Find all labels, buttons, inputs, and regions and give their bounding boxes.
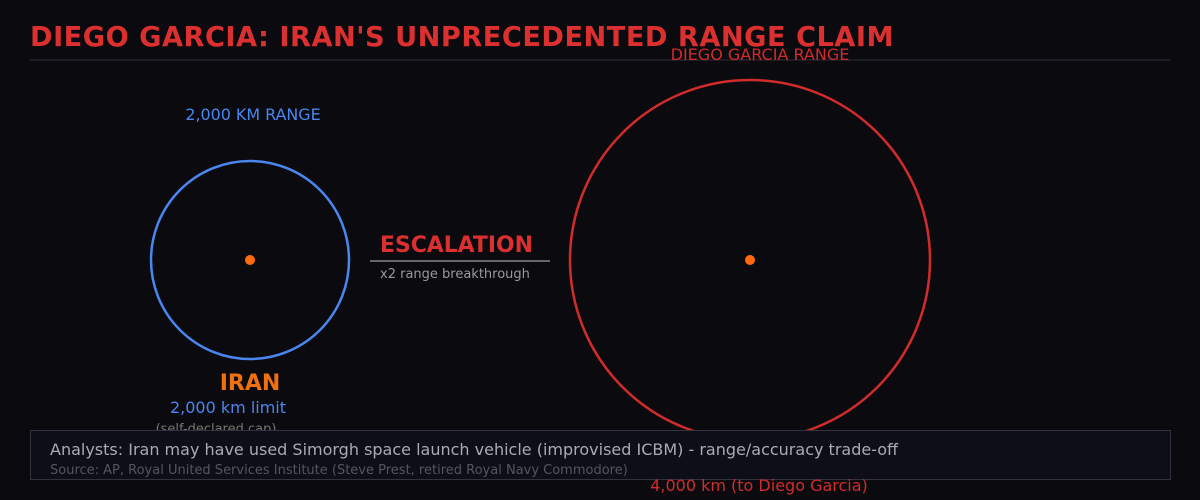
iran labels: 2,000 km limit (170, 398, 286, 417)
analysts note box: Analysts: Iran may have used Simorgh space launch vehicle (improvised ICBM) - range/accuracy trade-off (50, 440, 899, 459)
analysts note box (30, 430, 1170, 480)
iran range circle: 2,000 KM RANGE (185, 105, 321, 124)
iran labels (156, 371, 286, 437)
title: DIEGO GARCIA: IRAN'S UNPRECEDENTED RANGE CLAIM (30, 22, 894, 53)
iran range circle (151, 105, 349, 359)
diego garcia distance label: 4,000 km (to Diego Garcia) (650, 476, 868, 495)
iran labels: IRAN (220, 371, 280, 396)
diego garcia range circle: DIEGO GARCIA RANGE (671, 45, 849, 64)
iran labels: (self-declared cap) (156, 422, 276, 437)
escalation connector: x2 range breakthrough (380, 267, 530, 282)
escalation connector: ESCALATION (380, 233, 533, 258)
escalation connector (370, 233, 550, 282)
diego garcia range circle (570, 45, 930, 440)
analysts note box: Source: AP, Royal United Services Institute (Steve Prest, retired Royal Navy Commodore) (50, 463, 628, 478)
